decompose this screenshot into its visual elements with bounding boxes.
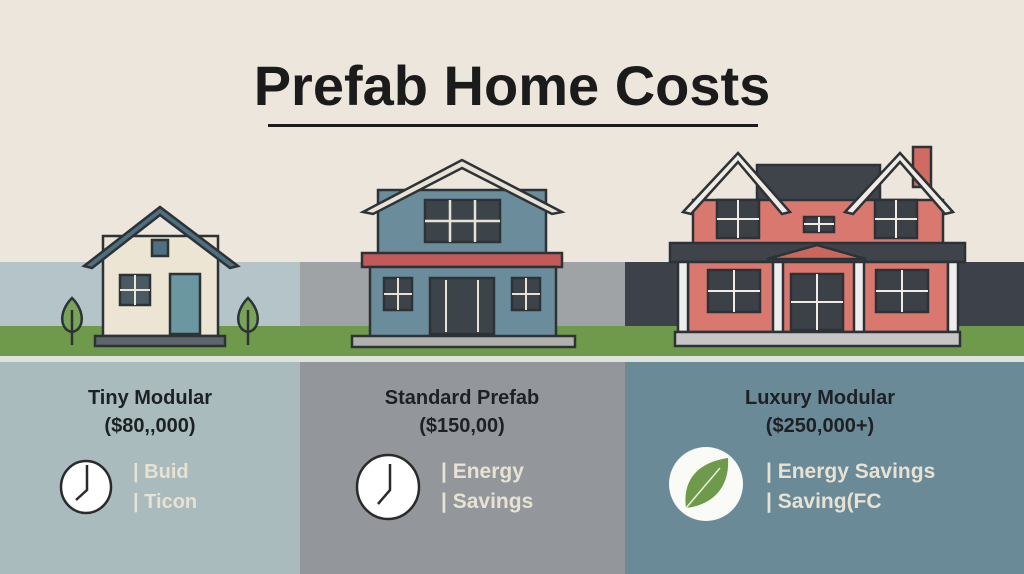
title: Prefab Home Costs <box>254 54 770 117</box>
house: standard prefab <box>352 160 575 347</box>
icon: clock <box>61 461 111 513</box>
panel: luxury modular: ($250,000+) <box>766 415 874 437</box>
icon: tree left <box>62 298 82 345</box>
panel: standard prefab: | Energy <box>441 460 524 483</box>
panel: tiny modular: | Ticon <box>133 491 197 513</box>
house: tiny modular <box>62 207 258 346</box>
background bands <box>0 262 1024 362</box>
panel: luxury modular <box>625 362 1024 574</box>
panel: standard prefab: Standard Prefab <box>385 387 539 409</box>
icon: leaf <box>669 447 743 521</box>
house: luxury modular <box>670 147 965 346</box>
panel: tiny modular: | Buid <box>133 461 189 483</box>
panel: luxury modular: Luxury Modular <box>745 387 895 409</box>
icon: clock <box>357 455 419 519</box>
panel: luxury modular: | Saving(FC <box>766 490 882 513</box>
panel: tiny modular: ($80,,000) <box>104 415 196 437</box>
panel: luxury modular: | Energy Savings <box>766 460 935 483</box>
icon: tree right <box>238 298 258 345</box>
panel: tiny modular: Tiny Modular <box>88 387 212 409</box>
panel: standard prefab <box>300 362 625 574</box>
panel: standard prefab: ($150,00) <box>419 415 505 437</box>
panel: tiny modular <box>0 362 300 574</box>
panel: standard prefab: | Savings <box>441 490 533 513</box>
